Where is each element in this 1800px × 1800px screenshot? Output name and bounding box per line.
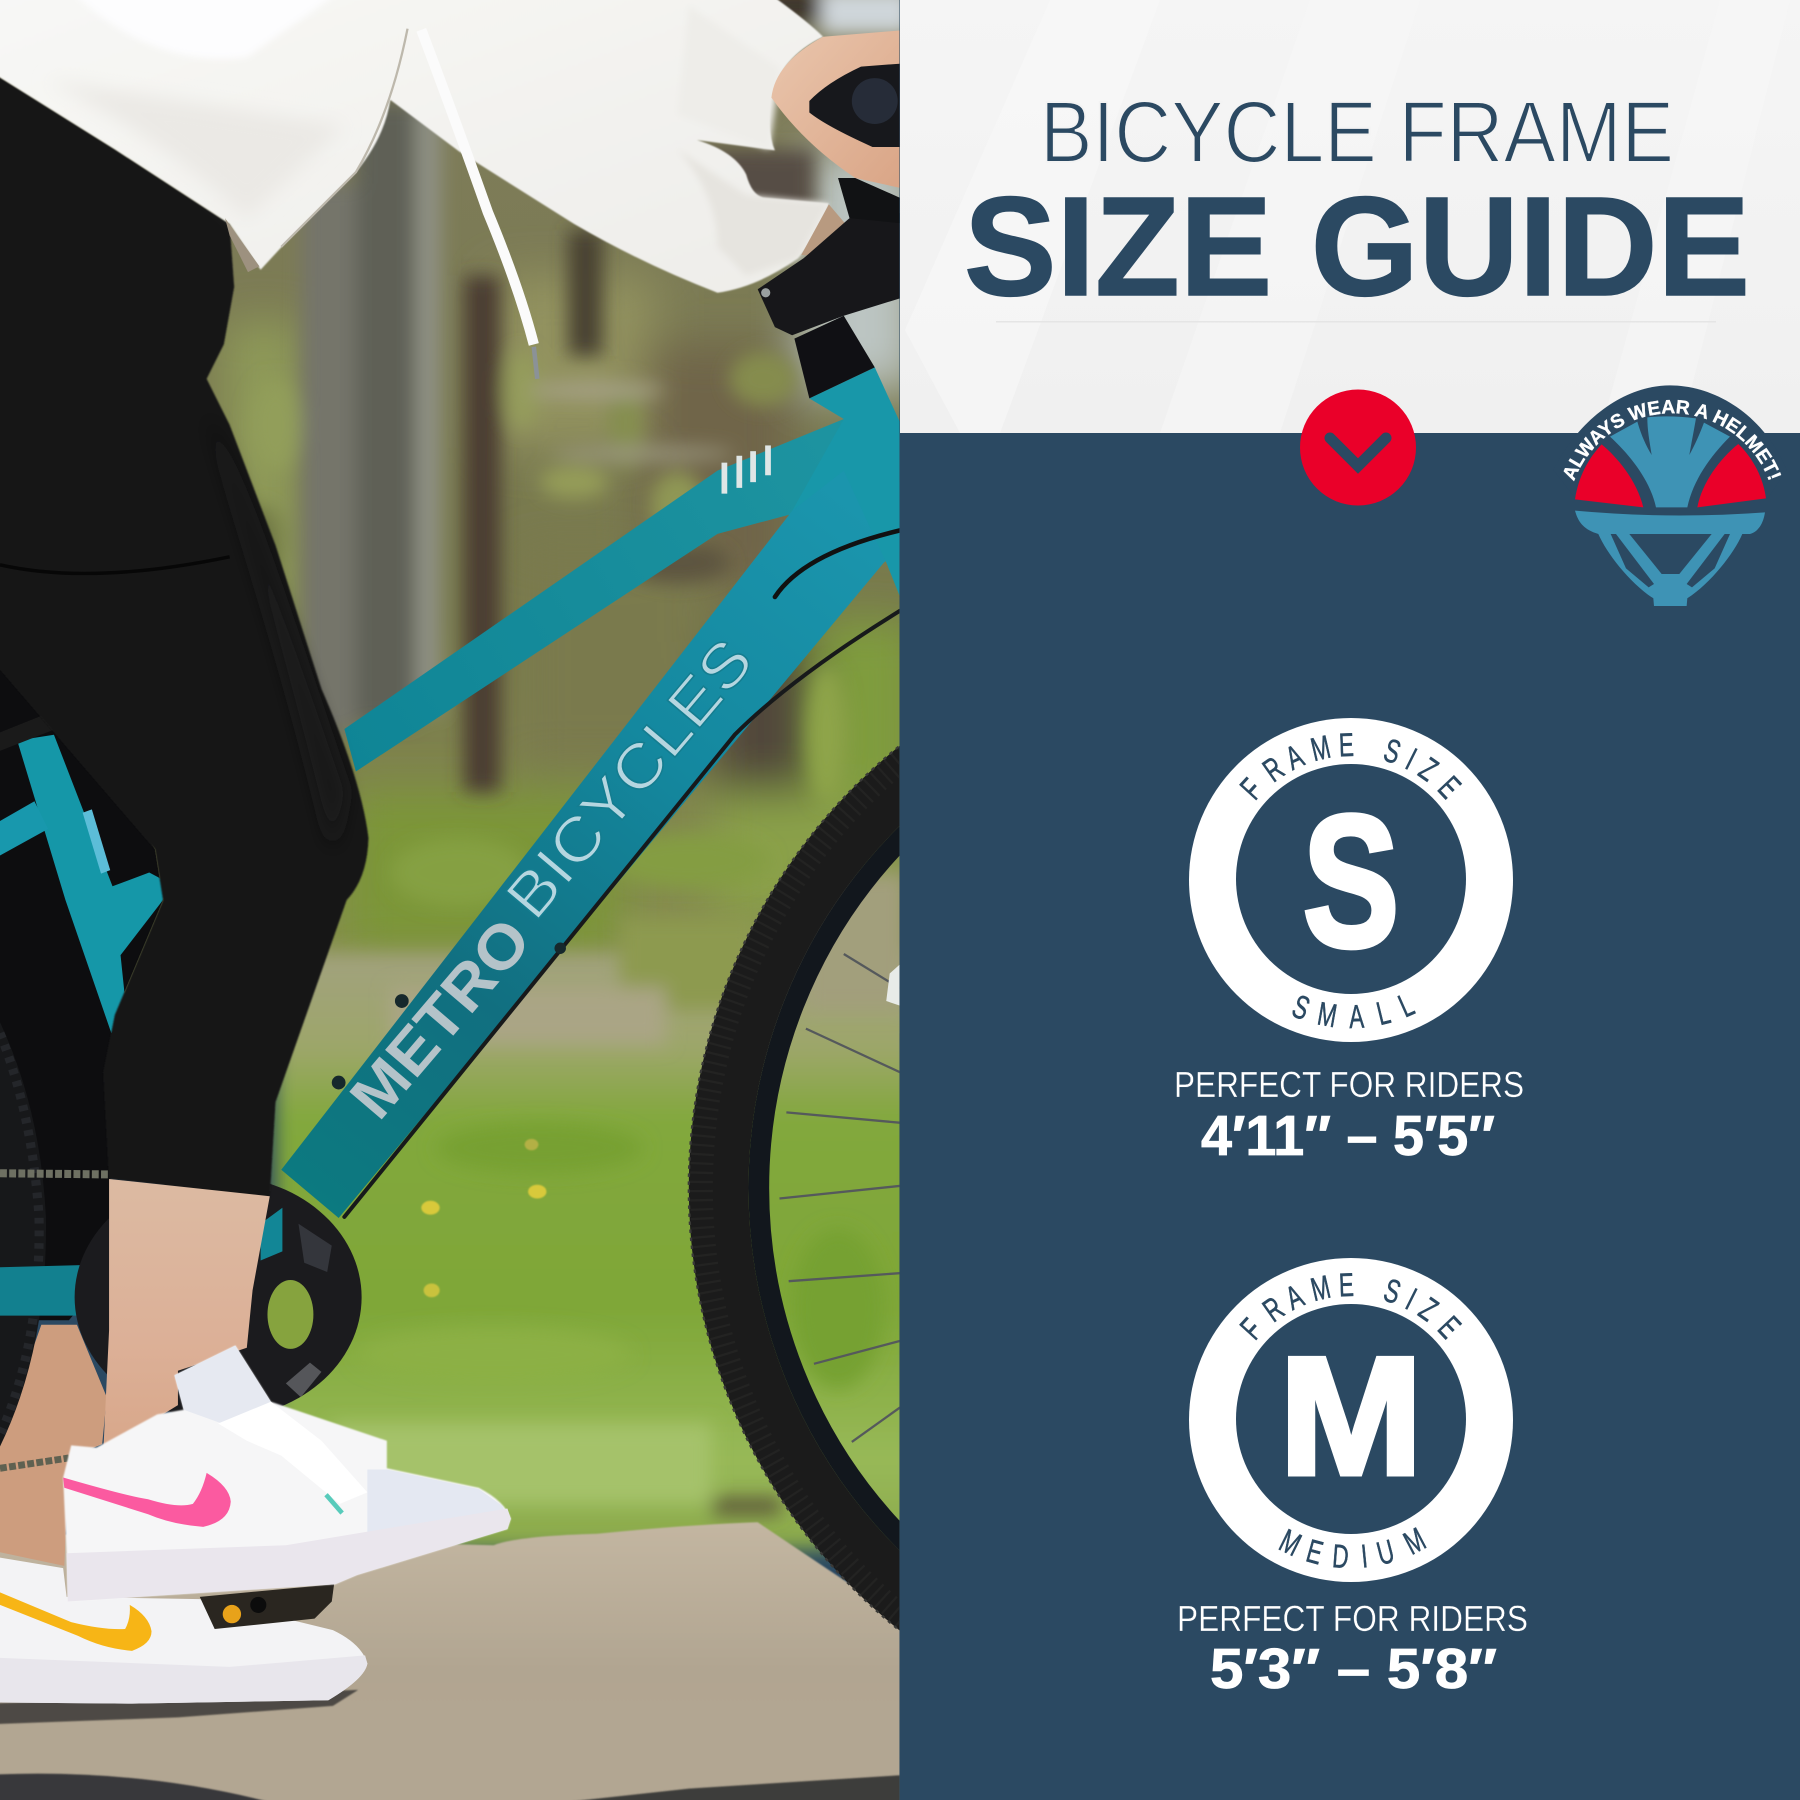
rider height small — [1174, 1064, 1524, 1168]
ring text: small: L — [1393, 985, 1419, 1024]
ring text: frame size: E — [1431, 1309, 1469, 1345]
front shoe — [63, 1345, 511, 1601]
rider height small: PERFECT FOR RIDERS — [1174, 1064, 1524, 1105]
badge: frame size small — [1189, 718, 1513, 1042]
ring text: small: S — [1287, 987, 1315, 1027]
ring text: frame size: S — [1380, 1271, 1405, 1311]
ring text: frame size: I — [1400, 740, 1423, 777]
ring text: frame size: E — [1431, 769, 1469, 805]
ring text: frame size: M — [1307, 1267, 1334, 1308]
panel: photo of rider and teal bicycle — [0, 0, 900, 1800]
hoodie drawstring — [421, 30, 537, 379]
ring text: frame size: F — [1232, 771, 1269, 806]
ring text: frame size: A — [1280, 1277, 1309, 1317]
ring text: frame size: M — [1307, 727, 1334, 768]
ring text: frame size: R — [1256, 1289, 1291, 1329]
ring text: frame size — [1232, 1265, 1469, 1346]
ring text: frame size: S — [1380, 731, 1405, 771]
ring text: frame size: I — [1400, 1280, 1423, 1317]
ring text: frame size: E — [1338, 1265, 1354, 1303]
bicycle frame: rear tubes — [0, 714, 166, 1316]
panel: header band — [900, 0, 1800, 433]
photo background: blurred woodland — [0, 0, 918, 1033]
far leg — [0, 574, 163, 1566]
rider height medium — [1177, 1598, 1528, 1701]
pedal — [200, 1584, 334, 1629]
grass field — [276, 872, 918, 1550]
panel: navy size area — [900, 433, 1800, 1800]
ring text: medium — [1274, 1520, 1431, 1575]
ring text: frame size: E — [1338, 725, 1354, 763]
pavement — [0, 1522, 918, 1800]
rear shoe — [0, 1557, 367, 1704]
ring text: medium: E — [1303, 1531, 1327, 1571]
ring text: medium: U — [1373, 1532, 1398, 1572]
chain — [0, 1173, 108, 1468]
icon: always wear a helmet badge: ALWAYS WEAR A HELMET! — [1564, 400, 1782, 482]
ring text: frame size: Z — [1412, 750, 1445, 788]
brand name on down tube: BICYCLES — [493, 626, 766, 932]
frame bolts — [332, 943, 566, 1089]
ring text: medium: D — [1331, 1537, 1350, 1575]
size letter M: M — [1279, 1322, 1423, 1510]
badge: frame size medium — [1189, 1258, 1513, 1582]
rider height small: 4′11″ – 5′5″ — [1201, 1104, 1495, 1168]
ring text: frame size: R — [1256, 749, 1291, 789]
brand name on down tube — [337, 626, 766, 1132]
icon: red chevron badge — [1300, 390, 1416, 506]
ring text: small: A — [1348, 997, 1365, 1035]
handlebar, stem and headset — [758, 63, 907, 398]
near ankle — [103, 1179, 270, 1451]
chainring — [75, 1176, 362, 1419]
ring text: small — [1287, 985, 1419, 1035]
title line two: SIZE GUIDE — [964, 167, 1750, 325]
icon: always wear a helmet badge — [1564, 385, 1782, 606]
ring text: frame size — [1232, 725, 1469, 806]
rider height medium: 5′3″ – 5′8″ — [1210, 1637, 1497, 1701]
hoodie — [0, 0, 829, 293]
bicycle frame: main tubes — [261, 367, 900, 1261]
hands — [771, 30, 907, 258]
front wheel with tyre, rim and spokes — [688, 746, 900, 1630]
ring text: frame size: Z — [1412, 1290, 1445, 1328]
rear wheel tyre — [0, 1010, 46, 1458]
ring text: frame size: F — [1232, 1311, 1269, 1346]
ring text: medium: I — [1359, 1537, 1369, 1575]
rider height medium: PERFECT FOR RIDERS — [1177, 1598, 1528, 1639]
ring text: small: M — [1315, 994, 1340, 1034]
near leg in black leggings — [0, 63, 369, 1197]
ring text: medium: M — [1397, 1520, 1431, 1562]
brand name on down tube: METRO — [337, 905, 545, 1132]
title line one: BICYCLE FRAME — [1040, 84, 1674, 181]
ring text: frame size: A — [1280, 737, 1309, 777]
ring text: medium: M — [1274, 1521, 1307, 1563]
cables and frame stripes — [344, 445, 900, 1217]
ring text: small: L — [1373, 993, 1394, 1032]
size letter S: S — [1303, 776, 1399, 986]
